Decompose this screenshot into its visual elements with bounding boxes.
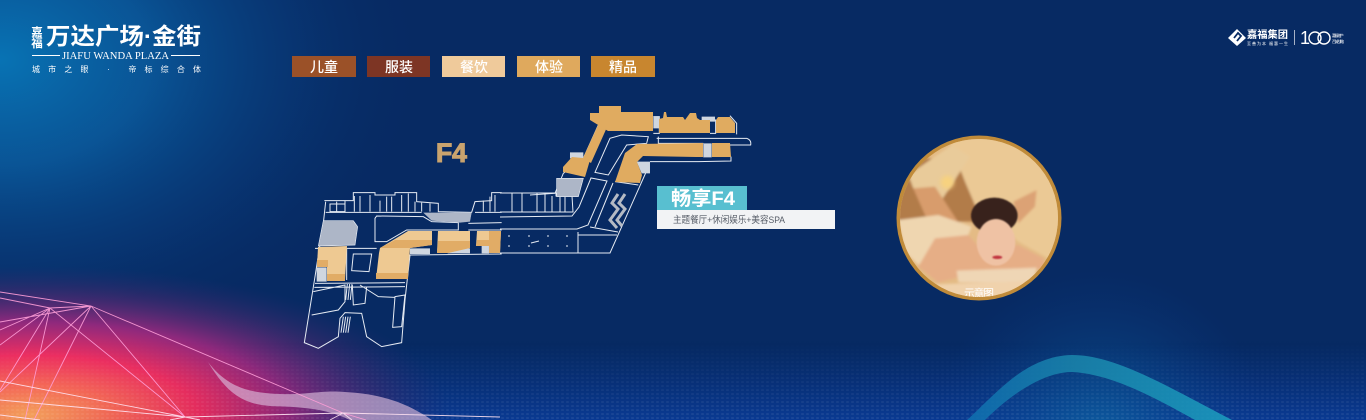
floor label F4: F4 [436, 138, 467, 168]
map: upper-right wing [530, 116, 751, 197]
brand logo: Jiafu Wanda Plaza: 嘉 [31, 25, 43, 39]
map: experience zones, upper wing [563, 106, 735, 183]
brand logo: Jiafu Wanda Plaza: 福 [31, 36, 43, 50]
callout heading [657, 186, 747, 210]
map: dining zones, lower wing [317, 231, 501, 281]
group logo: Jiafu Group 100: 嘉福集团 [1247, 28, 1288, 41]
group logo: Jiafu Group 100: 至善为本 福惠一生 [1247, 40, 1288, 46]
group logo: Jiafu Group 100 [1228, 28, 1344, 48]
tag: boutique: 精品 [609, 59, 637, 75]
tag: experience: 体验 [535, 59, 563, 75]
callout description: 主题餐厅+休闲娱乐+美容SPA [673, 214, 786, 226]
map: zone shading, lower wing [317, 231, 501, 281]
callout description [657, 210, 835, 229]
group logo: Jiafu Group 100: 1 [1300, 28, 1310, 48]
tag: dining [442, 56, 505, 77]
caption: 示意图 [964, 286, 994, 300]
decorative network lines [0, 292, 500, 420]
group logo: Jiafu Group 100: 百城战略 [1332, 38, 1344, 44]
map: east corridor [500, 170, 647, 253]
tag: children [292, 56, 356, 77]
tag: clothing: 服装 [385, 59, 413, 75]
brand logo: Jiafu Wanda Plaza: JIAFU WANDA PLAZA [62, 51, 169, 62]
group logo: Jiafu Group 100: 嘉福地产 [1332, 32, 1344, 38]
brand logo: Jiafu Wanda Plaza: 万达广场·金街 [46, 23, 201, 49]
callout: enjoy F4 [657, 186, 835, 229]
brand logo: Jiafu Wanda Plaza: 城市之眼 · 帝标综合体 [32, 64, 201, 74]
map: lower-left wing [304, 193, 502, 348]
tag: clothing [367, 56, 430, 77]
floor plan map [304, 106, 751, 348]
decorative wave: pale pink [208, 362, 432, 420]
decorative wave: teal [967, 355, 1232, 420]
tag: experience [517, 56, 580, 77]
brand logo: Jiafu Wanda Plaza [31, 23, 201, 74]
tag: boutique [591, 56, 655, 77]
tag: dining: 餐饮 [460, 59, 488, 75]
tag: children: 儿童 [310, 59, 338, 75]
illustration: spa massage photo [895, 135, 1065, 305]
callout heading: 畅享F4 [671, 187, 735, 210]
legend: category tags [292, 56, 655, 77]
